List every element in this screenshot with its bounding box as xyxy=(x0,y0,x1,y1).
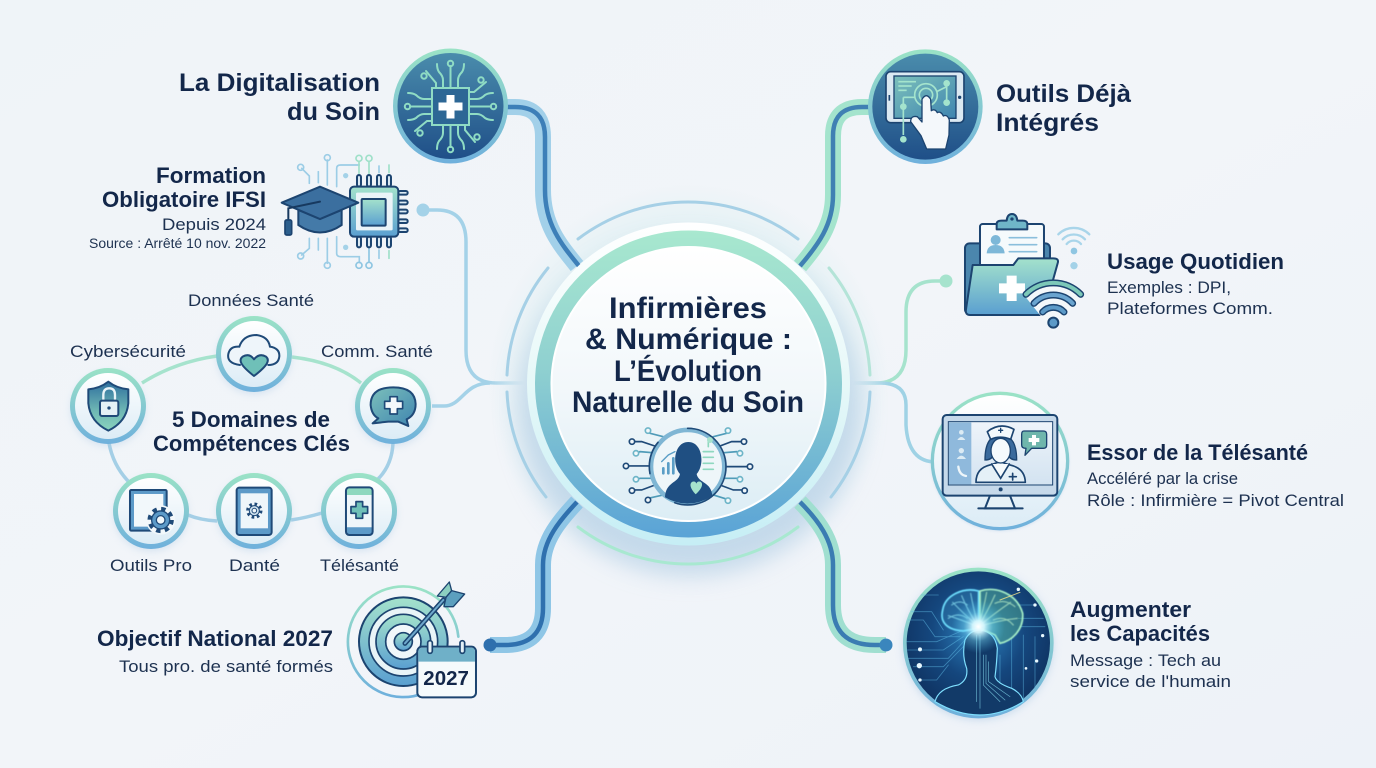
node: La Digitalisation du Soin xyxy=(179,48,508,164)
orbit arcs xyxy=(507,202,870,564)
title xyxy=(572,292,804,419)
text block: Message : Tech au xyxy=(1070,651,1221,670)
domain labels: Outils Pro xyxy=(110,556,192,575)
connector: thin right link to Usage Quotidien xyxy=(848,281,946,383)
text block: Essor de la Télésanté xyxy=(1087,440,1308,465)
text block: Depuis 2024 xyxy=(162,215,266,234)
connector: thick top-left link xyxy=(505,107,579,266)
node: Cybersécurité xyxy=(70,368,146,446)
panel: 5 domaines de compétences xyxy=(70,291,433,575)
node: Comm. Santé xyxy=(355,368,431,446)
icon: nurse on monitor xyxy=(931,392,1069,531)
node: Augmenter les Capacités xyxy=(903,568,1231,720)
node: Outils Déjà Intégrés xyxy=(868,49,1131,164)
domain labels: Comm. Santé xyxy=(321,342,433,361)
node: Objectif National 2027 xyxy=(97,582,476,697)
heading: La Digitalisation xyxy=(179,69,380,97)
heading: 5 domaines xyxy=(153,407,350,456)
connector: thick bottom-right link xyxy=(800,502,892,652)
central hub halo xyxy=(488,184,888,584)
text block: service de l'humain xyxy=(1070,672,1231,691)
domain labels xyxy=(70,291,433,575)
connector dot: Formation xyxy=(416,204,430,216)
hub shadow xyxy=(518,240,862,576)
connector: thick top-right link xyxy=(800,107,872,266)
central hub xyxy=(507,202,870,564)
icon: graduation cap and chip xyxy=(282,155,408,268)
text block: Exemples : DPI, xyxy=(1107,278,1231,297)
domain labels: Données Santé xyxy=(188,291,314,310)
title: & Numérique : xyxy=(585,323,792,356)
connector: thin left link to 5 domaines xyxy=(432,383,490,406)
title: Infirmières xyxy=(609,292,767,325)
connector dot: Usage Quotidien xyxy=(940,274,952,288)
icon: target with calendar xyxy=(348,582,476,697)
node: Essor de la Télésanté xyxy=(931,392,1344,531)
connector: thin right link to Télésanté xyxy=(848,383,936,462)
node: Formation Obligatoire IFSI xyxy=(89,155,408,268)
icon: chip with medical cross xyxy=(393,48,508,164)
text block: Accéléré par la crise xyxy=(1087,469,1238,488)
node: Usage Quotidien xyxy=(965,214,1284,332)
node: Données Santé xyxy=(216,316,292,394)
icon: hand on tablet xyxy=(868,49,983,164)
icon: glowing brain and human silhouette xyxy=(903,568,1054,720)
icon: nurse with digital circuit xyxy=(623,428,753,505)
text block: Tous pro. de santé formés xyxy=(119,657,333,676)
domain labels: Danté xyxy=(229,556,280,575)
node: Outils Pro xyxy=(113,473,189,551)
title: L’Évolution xyxy=(614,354,762,388)
heading xyxy=(179,69,380,126)
heading: 5 domaines: Compétences Clés xyxy=(153,431,350,456)
connector: thin left link to Formation xyxy=(423,210,530,383)
icon: medical folder with wifi xyxy=(965,214,1089,332)
heading: du Soin xyxy=(287,98,380,126)
heading: Outils Déjà xyxy=(996,80,1131,108)
heading xyxy=(996,80,1131,137)
text block: Augmenter xyxy=(1070,597,1191,622)
connector: thick bottom-left link xyxy=(484,502,577,652)
node: Danté xyxy=(216,473,292,551)
ring links xyxy=(109,356,393,521)
text block xyxy=(1087,440,1344,510)
icon: target with calendar: 2027 xyxy=(423,668,469,690)
text block xyxy=(1070,597,1231,691)
text block: Source : Arrêté 10 nov. 2022 xyxy=(89,236,266,251)
title: Naturelle du Soin xyxy=(572,386,804,419)
heading: 5 domaines: 5 Domaines de xyxy=(172,407,330,432)
text block: les Capacités xyxy=(1070,621,1210,646)
text block xyxy=(89,163,266,251)
text block: Formation xyxy=(156,163,266,188)
text block: Plateformes Comm. xyxy=(1107,299,1273,318)
text block: Objectif National 2027 xyxy=(97,626,333,651)
text block: Usage Quotidien xyxy=(1107,249,1284,274)
text block: Obligatoire IFSI xyxy=(102,187,266,212)
text block xyxy=(1107,249,1284,318)
domain labels: Télésanté xyxy=(320,556,399,575)
text block xyxy=(97,626,333,676)
text block: Rôle : Infirmière = Pivot Central xyxy=(1087,491,1344,510)
domain labels: Cybersécurité xyxy=(70,342,186,361)
node: Télésanté xyxy=(321,473,397,551)
heading: Intégrés xyxy=(996,109,1099,137)
